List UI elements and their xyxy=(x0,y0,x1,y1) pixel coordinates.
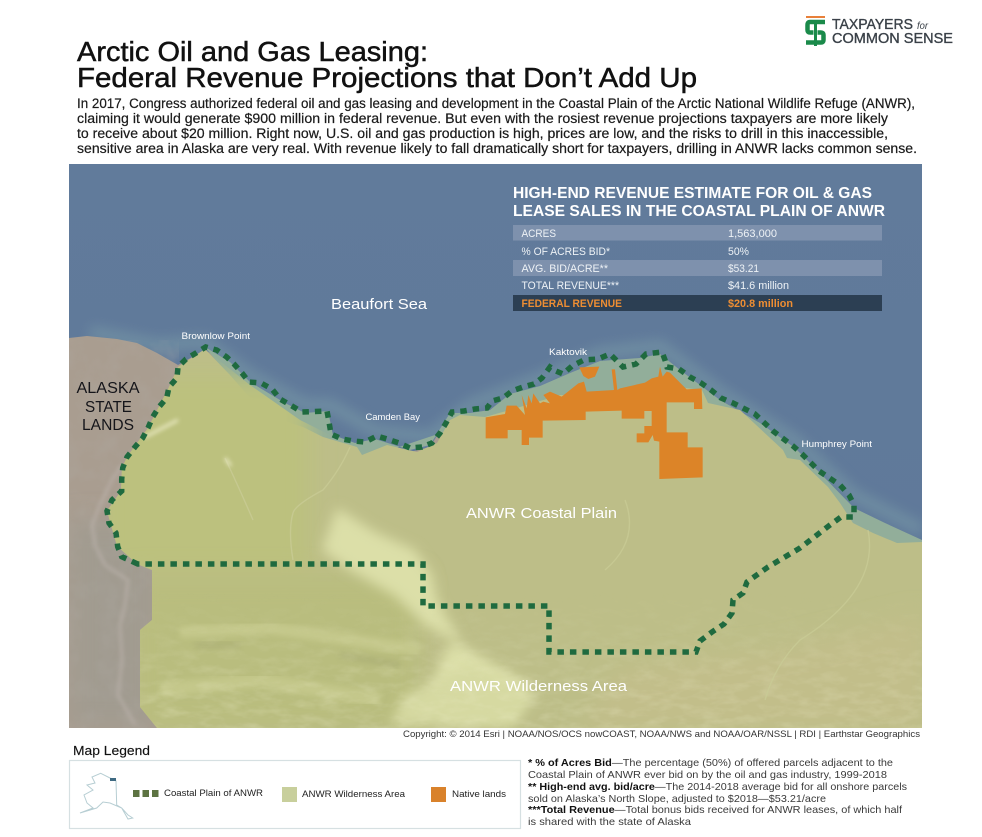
map labels: Brownlow Point xyxy=(182,331,250,342)
Coastal Plain of ANWR boundary xyxy=(107,347,854,652)
footnotes: ***Total Revenue —Total bonus bids received for ANWR leases, of which half xyxy=(528,804,902,816)
pale floodplain xyxy=(320,508,530,692)
map labels: Kaktovik xyxy=(549,347,587,358)
intro paragraph: claiming it would generate $900 million in federal revenue. But even with the rosiest revenue projections taxpayers are more likely xyxy=(77,111,888,126)
footnotes: ** High-end avg. bid/acre —The 2014-2018 average bid for all onshore parcels xyxy=(528,781,907,793)
ANWR wilderness and coastal plain overlay xyxy=(107,349,922,728)
intro paragraph: sensitive area in Alaska are very real. With revenue likely to fall dramatically short for taxpayers, drilling in ANWR lacks common sense. xyxy=(77,141,917,156)
table rows: % OF ACRES BID* xyxy=(522,246,611,258)
teal lagoon band xyxy=(205,347,922,560)
native lands xyxy=(486,367,703,479)
legend item: Native lands: Native lands xyxy=(452,789,506,800)
land base: Alaska state lands xyxy=(69,336,443,728)
table rows: 1,563,000 xyxy=(728,228,777,240)
label: Alaska State Lands xyxy=(76,382,140,430)
legend item: Native lands xyxy=(431,787,506,802)
footnotes: is shared with the state of Alaska xyxy=(528,816,691,828)
table rows: ACRES xyxy=(522,228,556,240)
table rows: AVG. BID/ACRE** xyxy=(522,263,609,275)
map copyright: Copyright: © 2014 Esri | NOAA/NOS/OCS nowCOAST, NOAA/NWS and NOAA/OAR/NSSL | RDI | Earthstar Geographics xyxy=(403,729,920,740)
pale wilderness snow patches xyxy=(390,682,532,728)
table rows: TOTAL REVENUE*** xyxy=(522,280,620,292)
table heading: LEASE SALES IN THE COASTAL PLAIN OF ANWR xyxy=(513,203,885,220)
map labels: ANWR Wilderness Area xyxy=(450,678,628,695)
foothills tone xyxy=(140,586,409,720)
western plain tone xyxy=(100,375,310,575)
map labels: ANWR Coastal Plain xyxy=(466,505,617,522)
table heading xyxy=(514,187,885,216)
intro paragraph xyxy=(77,96,917,156)
revenue estimate table xyxy=(513,185,885,311)
logo: Taxpayers for Common Sense: COMMON SENSE xyxy=(832,30,953,47)
bright river bar xyxy=(145,420,231,466)
coastal shallows glow xyxy=(90,332,922,530)
intro paragraph: In 2017, Congress authorized federal oil and gas leasing and development in the Coastal Plain of the Arctic National Wildlife Refuge (ANWR), xyxy=(77,96,915,111)
map labels: Camden Bay xyxy=(366,412,420,423)
table rows: $41.6 million xyxy=(728,280,789,292)
table rows: $20.8 million xyxy=(728,298,793,310)
terrain texture xyxy=(140,650,922,728)
title: Federal Revenue Projections that Don’t Add Up xyxy=(77,62,697,93)
title xyxy=(77,36,697,93)
legend heading: Map Legend xyxy=(73,743,150,758)
river on state lands xyxy=(92,465,135,725)
logo: Taxpayers for Common Sense: for xyxy=(917,21,929,32)
table heading: HIGH-END REVENUE ESTIMATE FOR OIL & GAS xyxy=(513,185,872,202)
table rows: FEDERAL REVENUE xyxy=(522,298,622,310)
table rows: $53.21 xyxy=(728,263,759,275)
legend item: Coastal Plain of ANWR: Coastal Plain of ANWR xyxy=(164,788,263,799)
icon: Alaska locator xyxy=(80,773,133,819)
label: Alaska State Lands: STATE xyxy=(85,399,132,416)
footnotes: sold on Alaska’s North Slope, adjusted to $2018—$53.21/acre xyxy=(528,793,826,805)
map labels: Humphrey Point xyxy=(802,439,872,450)
footnotes: Coastal Plain of ANWR ever bid on by the oil and gas industry, 1999-2018 xyxy=(528,769,887,781)
map labels: Beaufort Sea xyxy=(331,296,428,313)
label: Alaska State Lands: ALASKA xyxy=(76,380,140,397)
sea xyxy=(69,164,922,540)
eastern foothills tone xyxy=(580,615,922,728)
legend box xyxy=(70,760,520,828)
table rows: 50% xyxy=(728,246,749,258)
footnotes: * % of Acres Bid —The percentage (50%) of offered parcels adjacent to the xyxy=(528,757,893,769)
table rows xyxy=(513,225,882,311)
footnotes xyxy=(528,757,907,828)
foothill ridges xyxy=(180,628,420,650)
rivers xyxy=(225,447,870,700)
legend item: ANWR Wilderness Area xyxy=(282,787,406,802)
map labels xyxy=(182,296,872,695)
map panel xyxy=(69,164,922,730)
legend item: ANWR Wilderness Area: ANWR Wilderness Area xyxy=(302,789,406,800)
label: Alaska State Lands: LANDS xyxy=(82,417,134,434)
logo: Taxpayers for Common Sense xyxy=(806,16,953,47)
intro paragraph: to receive about $20 million. Right now, U.S. oil and gas production is high, prices are low, and the risks to drill in this inaccessible, xyxy=(77,126,888,141)
logo: Taxpayers for Common Sense: TAXPAYERS xyxy=(832,16,913,33)
title: Arctic Oil and Gas Leasing: xyxy=(77,36,428,67)
